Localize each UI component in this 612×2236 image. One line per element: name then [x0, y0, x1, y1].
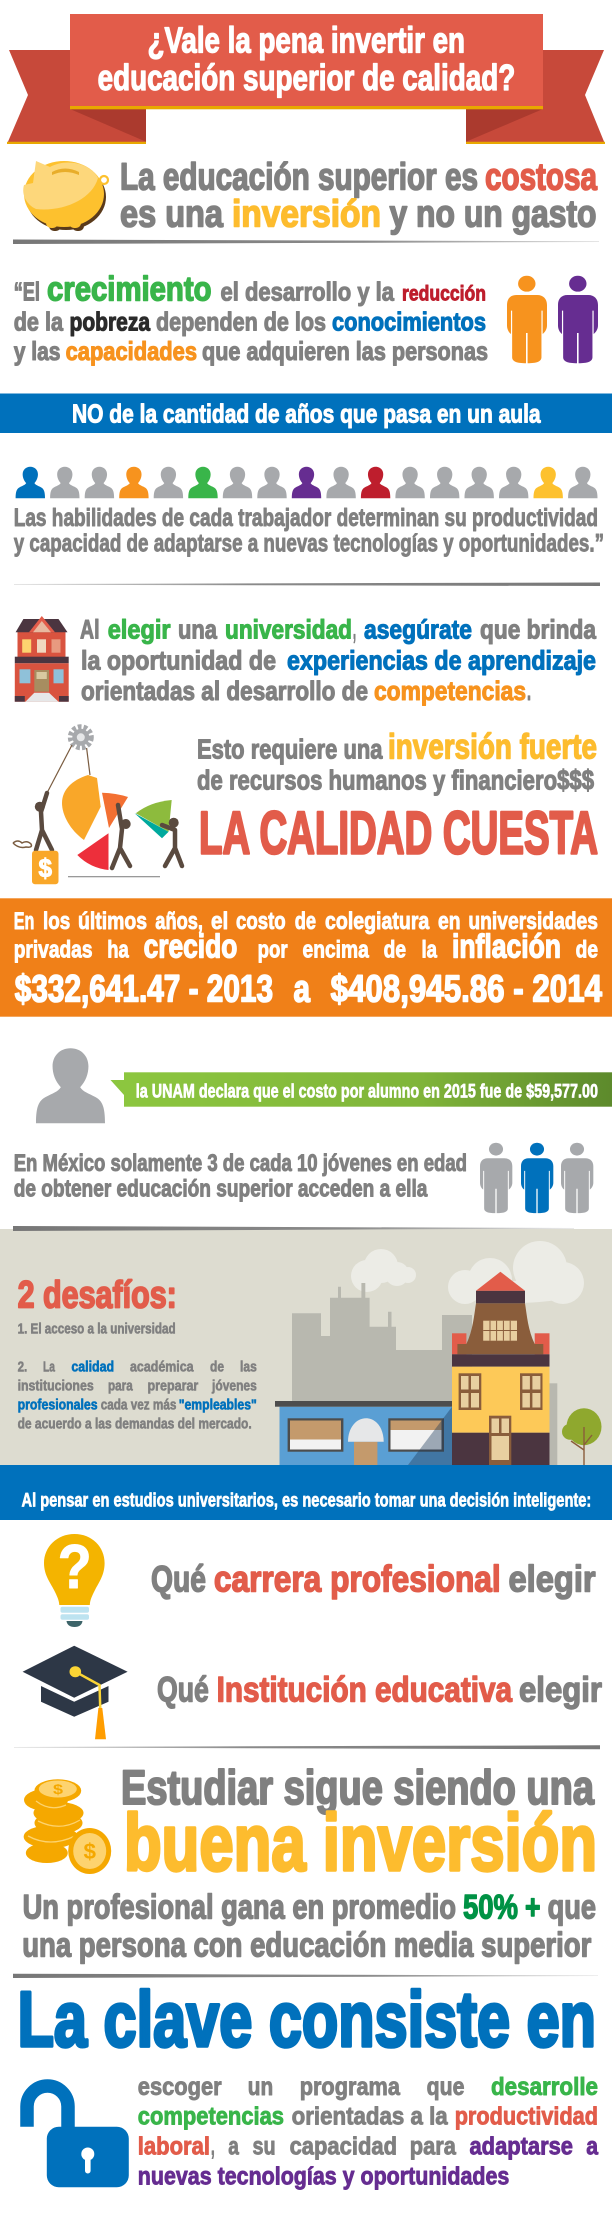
icon: coin stack [24, 1779, 111, 1874]
text: programa competencias: desarrolle [491, 2073, 598, 2101]
orange panel: costo colegiatura: costo [236, 908, 286, 935]
text: profesional gana: + [525, 1888, 540, 1926]
text: programa competencias: nuevas tecnologías y oportunidades [138, 2162, 509, 2190]
text: profesional gana: Un profesional gana en promedio [23, 1888, 456, 1926]
orange panel: costo colegiatura: los [43, 908, 70, 935]
text: elegir universidad: elegir [108, 614, 171, 644]
text: desafios list: calidad [71, 1359, 114, 1376]
text: programa competencias: capacidad [290, 2132, 397, 2160]
text: desafios list: La [43, 1359, 55, 1376]
heading: costosa: inversión [232, 194, 381, 236]
orange panel: costo colegiatura: En [14, 908, 34, 935]
text: elegir universidad: , [353, 614, 356, 644]
text: elegir universidad: una [178, 614, 218, 644]
text: elegir universidad: la oportunidad de [81, 645, 276, 675]
text: desafios list: de [210, 1359, 224, 1376]
icon: people lifting pie chart [13, 727, 182, 884]
orange panel: costo colegiatura: privadas [14, 937, 93, 964]
icon: three people [480, 1143, 593, 1213]
text: elegir universidad [80, 614, 597, 706]
blue band: decision inteligente [0, 1465, 612, 1520]
orange panel: costo colegiatura: a [294, 969, 311, 1011]
orange panel: costo colegiatura: el [211, 908, 228, 935]
orange panel: costo colegiatura: inflación [452, 928, 561, 965]
text: la calidad cuesta [197, 727, 598, 866]
quote text: el desarrollo y la [220, 277, 394, 307]
icon: coin stack: $ [53, 1781, 63, 1797]
heading: costosa [120, 156, 598, 236]
text: elegir universidad: asegúrate [364, 614, 472, 644]
text: carrera profesional: elegir [508, 1559, 596, 1600]
quote text: crecimiento [47, 271, 212, 309]
orange panel: costo colegiatura: la [422, 937, 438, 964]
text: desafios list: de acuerdo a las demandas del mercado. [18, 1415, 252, 1432]
text: programa competencias: , [211, 2132, 215, 2160]
orange panel: costo colegiatura: crecido [144, 928, 237, 965]
quote text [14, 271, 488, 366]
text: programa competencias: laboral [138, 2132, 210, 2160]
icon: university house [15, 616, 69, 702]
text: programa competencias: orientadas a la [292, 2102, 449, 2130]
text: profesional gana [22, 1888, 596, 1965]
quote text: capacidades [66, 336, 197, 366]
text: elegir universidad: . [527, 676, 531, 706]
text: programa competencias: a [228, 2132, 240, 2160]
icon: person silhouette [36, 1048, 105, 1123]
text: habilidades [14, 504, 604, 558]
text: desafios list: instituciones [18, 1377, 94, 1394]
quote text: pobreza [70, 307, 150, 337]
text: la calidad cuesta: Esto requiere una [197, 733, 383, 764]
orange panel: costo colegiatura: años, [155, 908, 203, 935]
icon: open padlock [27, 2086, 129, 2187]
quote text: “El [14, 277, 40, 307]
icon: coin stack: $ [84, 1839, 96, 1864]
icon: two people [507, 276, 598, 363]
heading: buena inversion [121, 1762, 597, 1887]
icon: graduation cap [23, 1646, 128, 1739]
text: desafios list: cada vez más [101, 1396, 176, 1413]
icon: light bulb: ? [58, 1533, 92, 1602]
text: programa competencias: un [248, 2073, 273, 2101]
text: desafios list [18, 1320, 257, 1432]
title banner: ¿Vale la pena invertir en [148, 19, 465, 60]
quote text: que adquieren las personas [202, 336, 488, 366]
text: programa competencias: programa [300, 2073, 401, 2101]
icon: people lifting pie chart: $ [38, 853, 52, 883]
text: programa competencias: para [410, 2132, 457, 2160]
orange panel: costo colegiatura: por [258, 937, 288, 964]
row of workers [16, 467, 598, 498]
text: desafios list: profesionales [18, 1396, 98, 1413]
quote text: dependen de los [156, 307, 326, 337]
title banner [7, 14, 605, 144]
text: programa competencias: competencias [138, 2102, 284, 2130]
text: profesional gana: que [548, 1888, 596, 1926]
text: institucion educativa: elegir [519, 1671, 602, 1710]
quote text: conocimientos [332, 307, 486, 337]
text: elegir universidad: universidad [225, 614, 352, 644]
text: desafios list: 2. [18, 1359, 27, 1376]
text: institucion educativa: Institución educativa [217, 1671, 512, 1710]
orange panel: costo colegiatura: encima [302, 937, 369, 964]
text: desafios list: 1. El acceso a la universidad [18, 1320, 176, 1337]
text: elegir universidad: competencias [374, 676, 526, 706]
heading: costosa: es una [120, 194, 224, 236]
callout: UNAM [110, 1072, 612, 1107]
text: desafios list: preparar [148, 1377, 198, 1394]
blue band: años en un aula [0, 394, 612, 433]
text: desafios list: las [240, 1359, 257, 1376]
heading: costosa: La educación superior es [120, 156, 478, 198]
quote text: reducción [402, 283, 486, 306]
orange panel: costo colegiatura [0, 898, 612, 1017]
text: elegir universidad: Al [80, 614, 100, 644]
text: institucion educativa: Qué [157, 1671, 209, 1710]
orange panel: costo colegiatura: de [295, 908, 316, 935]
orange panel: costo colegiatura: ha [107, 937, 129, 964]
quote text: y las [14, 336, 60, 366]
text: programa competencias: adaptarse [470, 2132, 573, 2160]
text: 3 de cada 10 [14, 1150, 467, 1203]
text: carrera profesional: Qué [151, 1559, 206, 1600]
illustration: city and buildings [275, 1241, 602, 1465]
text: profesional gana: 50% [463, 1888, 518, 1926]
orange panel: costo colegiatura: $332,641.47 - 2013 [15, 969, 273, 1011]
orange panel: costo colegiatura: últimos [78, 908, 147, 935]
orange panel: costo colegiatura: de [384, 937, 406, 964]
icon: piggy bank [23, 161, 108, 231]
text: 3 de cada 10: de obtener educación superior acceden a ella [14, 1176, 428, 1203]
text: carrera profesional: carrera profesional [214, 1559, 501, 1600]
orange panel: costo colegiatura: de [576, 937, 598, 964]
orange panel: costo colegiatura: en [438, 908, 460, 935]
icon: light bulb [44, 1533, 105, 1627]
text: elegir universidad: orientadas al desarrollo de [81, 676, 368, 706]
text: programa competencias: que [427, 2073, 464, 2101]
heading: 2 desafios: 2 desafíos: [18, 1274, 177, 1316]
text: programa competencias: a [586, 2132, 599, 2160]
text: 3 de cada 10: En México solamente 3 de cada 10 jóvenes en edad [14, 1150, 467, 1177]
panel: 2 desafios [0, 1226, 612, 1465]
quote text: de la [14, 307, 63, 337]
text: desafios list: académica [130, 1359, 194, 1376]
text: desafios list: para [108, 1377, 133, 1394]
text: programa competencias [138, 2073, 599, 2190]
text: programa competencias: su [252, 2132, 276, 2160]
text: desafios list: jóvenes [211, 1377, 257, 1394]
orange panel: costo colegiatura: colegiatura [325, 908, 430, 935]
text: programa competencias: escoger [138, 2073, 222, 2101]
text: desafios list: "empleables" [179, 1396, 257, 1413]
